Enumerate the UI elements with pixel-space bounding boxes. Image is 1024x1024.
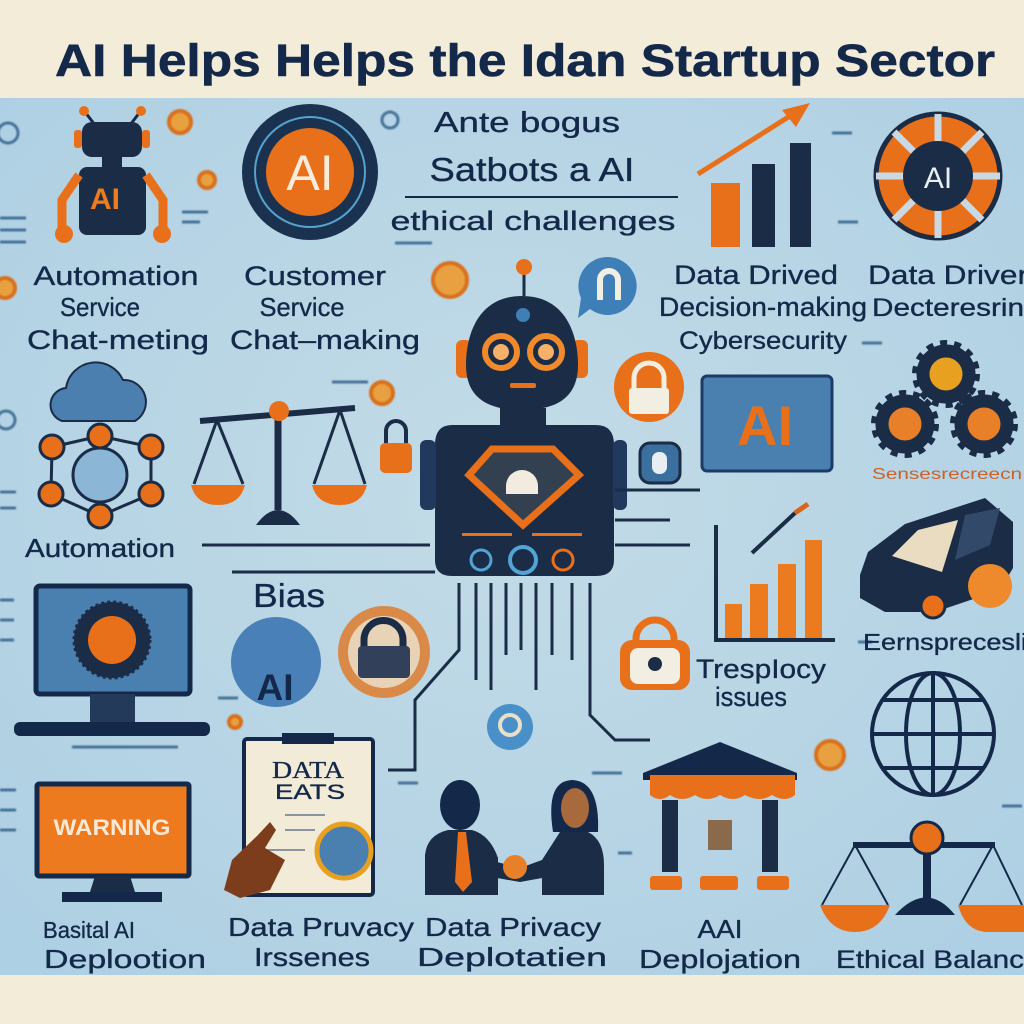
heading: ethical challenges block: Ante bogus (434, 107, 620, 139)
label: data driven column 2: Decteresrin (872, 294, 1024, 322)
label: automation service: Chat-meting (27, 325, 209, 355)
icon: car (860, 498, 1013, 618)
label: data driven column 1 (659, 260, 867, 355)
heading: ethical challenges block: ethical challenges (390, 206, 676, 236)
label: data driven column 1: Cybersecurity (679, 327, 848, 355)
label: customer service (230, 261, 420, 355)
label: bottom row 1: Deplootion (44, 944, 206, 974)
label: garbled small orange text: Sensesrecreecn (872, 466, 1022, 483)
label: automation service: Service (60, 292, 140, 322)
icon: clipboard data: DATA (272, 758, 345, 784)
label: automation service: Automation (34, 261, 198, 291)
chart: orange bars (716, 504, 835, 640)
label: ethical balance: Ethical Balanc (836, 946, 1024, 974)
icon: small padlock (380, 421, 412, 473)
label: transparency issues: issues (715, 682, 787, 712)
icon: speech lock bubble (578, 257, 637, 318)
label: bottom row 4: Deplojation (639, 944, 801, 974)
icon: monitor warning (14, 586, 210, 736)
label: bottom row 1 (43, 917, 206, 974)
icon: cloud network (39, 362, 163, 528)
label: transparency issues (696, 654, 827, 712)
label: bottom row 1: Basital AI (43, 917, 135, 943)
label: bottom row 4 (639, 914, 801, 974)
label: data driven column 1: Decision-making (659, 292, 867, 322)
label: data driven column 2: Data Driver (868, 260, 1024, 290)
label: bottom row 3 (417, 912, 607, 972)
label: transparency issues: TrespIocy (696, 654, 827, 684)
label: data driven column 1: Data Drived (674, 260, 838, 290)
label: garbled word: Eernsprecesli (863, 629, 1024, 655)
icon: clipboard data: EATS (275, 781, 345, 804)
icon: orange padlock circle (614, 352, 684, 422)
label: customer service: Customer (244, 261, 386, 291)
icon: AI gear ring: AI (924, 162, 952, 195)
label: bias: Bias (253, 577, 325, 614)
icon: lock circle (487, 704, 533, 750)
heading: ethical challenges block (390, 107, 678, 236)
icon: bank building (643, 742, 797, 890)
label: data driven column 2 (868, 260, 1024, 322)
panel: AI screen: AI (737, 394, 793, 457)
label: bottom row 3: Deplotatien (417, 942, 607, 972)
icon: AI gear ring (876, 114, 1000, 238)
label: bottom row 2: Irssenes (254, 942, 370, 972)
heading: ethical challenges block: Satbots a AI (430, 151, 634, 188)
icon: AI bias head (231, 617, 321, 708)
label: bottom row 2: Data Pruvacy (228, 912, 414, 942)
icon: AI target circle (242, 104, 378, 240)
label: bottom row 2 (228, 912, 414, 972)
icon: padlock seal (338, 606, 430, 698)
label: bottom row 4: AAI (698, 914, 742, 944)
icon: small robot (55, 106, 171, 243)
label: automation: Automation (25, 533, 175, 563)
icon: clipboard data (224, 733, 373, 898)
label: bottom row 3: Data Privacy (425, 912, 601, 942)
icon: small robot: AI (90, 183, 120, 216)
decorative small icons (0, 111, 1022, 853)
icon: warning monitor (37, 784, 189, 902)
icon: balance scale (191, 401, 367, 525)
label: customer service: Chat–making (230, 325, 420, 355)
panel: AI screen (702, 376, 832, 471)
label: automation service (27, 261, 209, 355)
label: customer service: Service (260, 292, 344, 322)
icon: warning monitor: WARNING (54, 815, 170, 840)
title: AI Helps Helps the Idan Startup Sector (55, 35, 995, 86)
icon: globe (872, 673, 994, 795)
icon: handshake people (425, 780, 604, 895)
circuit lines below robot (202, 490, 700, 770)
icon: large padlock (620, 620, 690, 690)
icon: AI target circle: AI (286, 145, 334, 201)
icon: gears (874, 343, 1015, 455)
icon: AI bias head: AI (256, 667, 294, 708)
icon: small lock badge (640, 443, 680, 483)
central robot (420, 259, 627, 576)
chart: rising bars with arrow (698, 103, 811, 247)
icon: ethical balance scale (820, 822, 1024, 932)
